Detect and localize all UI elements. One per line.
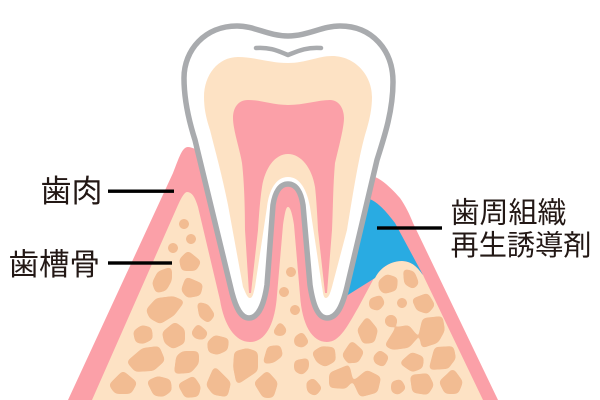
- dentin: [204, 56, 372, 298]
- label: alveolar bone: [8, 248, 172, 282]
- crown fissure: [256, 48, 321, 55]
- regeneration agent: blue area: [343, 197, 423, 298]
- bone pores: [111, 220, 461, 396]
- pulp: [233, 100, 344, 293]
- label: gingiva: [40, 174, 174, 209]
- label: periodontal tissue regeneration inducer: [377, 196, 591, 261]
- label: periodontal tissue regeneration inducer: 歯周組織: [450, 196, 567, 230]
- label: gingiva: 歯肉: [40, 174, 102, 209]
- alveolar bone: [92, 192, 483, 400]
- label: alveolar bone: 歯槽骨: [8, 248, 100, 282]
- gum: [68, 147, 498, 400]
- diagram: tooth cross-section: [68, 26, 498, 400]
- tooth outline and enamel: [184, 26, 393, 318]
- label: periodontal tissue regeneration inducer: 再生誘導剤: [450, 229, 591, 261]
